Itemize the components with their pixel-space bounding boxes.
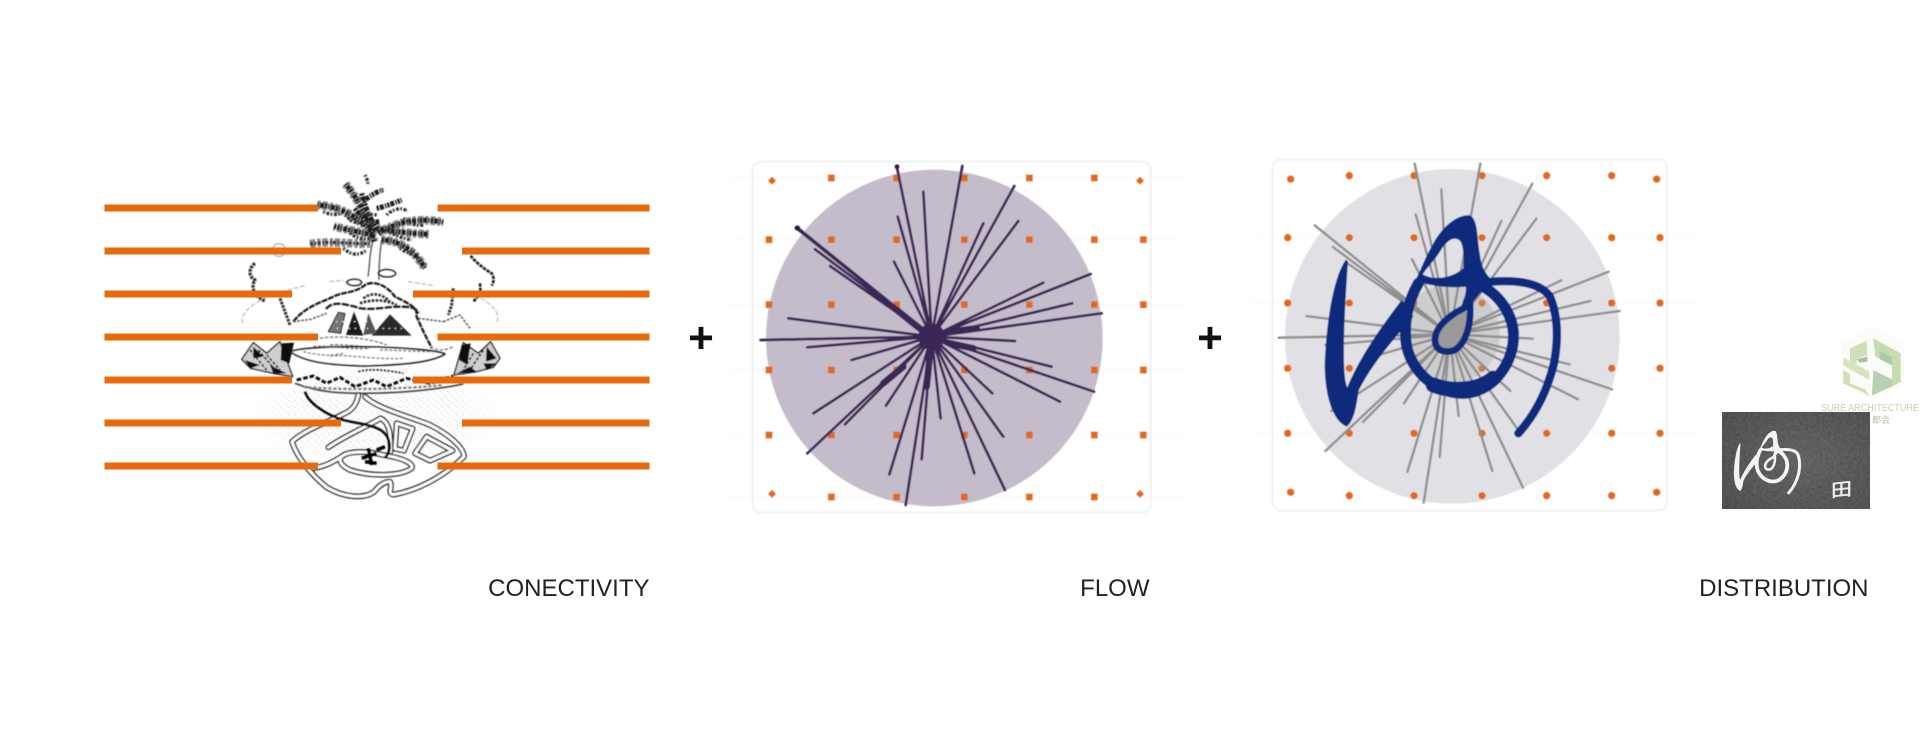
watermark logo bbox=[1821, 327, 1919, 425]
radiating flow lines bbox=[761, 164, 1102, 505]
seal character: 田 bbox=[1831, 479, 1852, 501]
small clouds bbox=[347, 270, 396, 286]
orange connection lines: right bbox=[413, 204, 650, 470]
navy calligraphy glyph bbox=[1325, 215, 1557, 433]
label: distribution: DISTRIBUTION bbox=[1699, 575, 1868, 602]
mountain ridge bbox=[293, 283, 432, 348]
panel: flow bbox=[730, 162, 1183, 602]
island base and roots bbox=[242, 342, 500, 496]
plus sign 2: + bbox=[1197, 314, 1223, 363]
panel: conectivity bbox=[104, 175, 650, 602]
ink rubbing image of the glyph bbox=[1722, 412, 1870, 509]
grid panel bbox=[730, 162, 1183, 513]
outer rocks left bbox=[242, 342, 293, 377]
radiating flow lines, faded bbox=[1279, 164, 1620, 503]
tree and mountain bbox=[242, 175, 498, 352]
logo mark bbox=[1842, 327, 1904, 400]
plus sign 1: + bbox=[688, 314, 714, 363]
logo chinese wordmark: 都会 bbox=[1872, 414, 1890, 425]
sun disc bbox=[273, 244, 285, 256]
label: conectivity: CONECTIVITY bbox=[488, 575, 650, 602]
trunk bbox=[368, 240, 382, 280]
orange grid dots bbox=[1284, 172, 1664, 499]
foliage underlay bbox=[309, 183, 443, 268]
grid panel bbox=[1250, 159, 1697, 511]
panel: distribution bbox=[1250, 159, 1870, 602]
grey circle bbox=[1285, 169, 1620, 504]
outer rocks right bbox=[454, 342, 500, 375]
creatures bbox=[250, 263, 265, 301]
dark root bbox=[305, 392, 390, 457]
purple flow circle bbox=[766, 170, 1103, 506]
foliage bbox=[317, 183, 443, 268]
white calligraphy glyph bbox=[1734, 431, 1800, 493]
orange connection lines: left bbox=[104, 204, 341, 470]
stipple under island bbox=[265, 366, 485, 468]
root maze bbox=[292, 395, 464, 496]
orange grid dots bbox=[766, 175, 1147, 500]
island body bbox=[290, 347, 445, 366]
halo dashed ring bbox=[242, 280, 498, 324]
island top scribble bbox=[320, 337, 453, 352]
illustration: world tree, island and roots bbox=[240, 175, 510, 496]
label: flow: FLOW bbox=[1080, 575, 1150, 602]
base plate bbox=[295, 383, 463, 393]
figure at the root centre bbox=[362, 447, 385, 465]
